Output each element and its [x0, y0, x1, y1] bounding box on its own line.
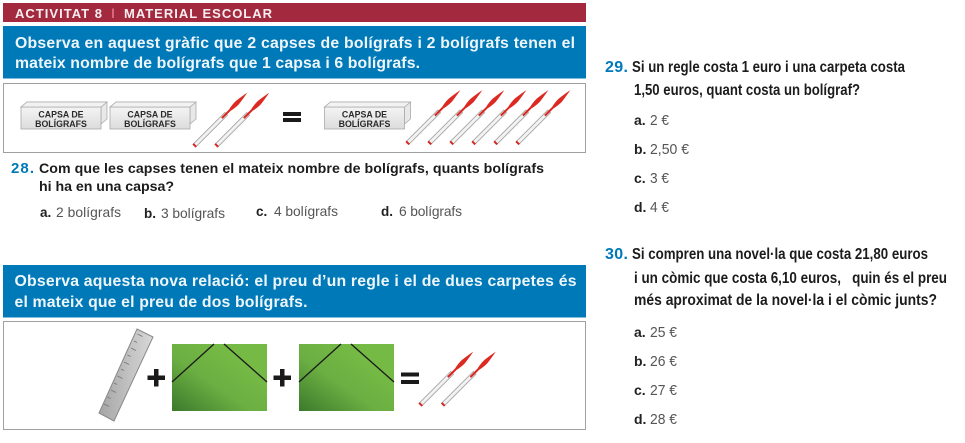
- question 28: d.: [381, 204, 393, 219]
- question 29: d.: [634, 199, 646, 215]
- panel: second blue instruction: [3, 265, 586, 318]
- question 30: c.: [634, 382, 646, 398]
- panel: second blue instruction: Observa aquesta nova relació: el preu d’un regle i el de dues carpetes és: [14, 273, 577, 290]
- question 30: 28 €: [650, 411, 678, 428]
- icon: first green folder: [172, 344, 267, 411]
- question 29: a.: [634, 112, 646, 128]
- icon: second box of pens: BOLÍGRAFS: [124, 119, 176, 129]
- icon: first box of pens: BOLÍGRAFS: [35, 119, 87, 129]
- question 28: [11, 160, 544, 221]
- question 28: 28.: [11, 160, 34, 177]
- panel: first blue instruction: Observa en aquest gràfic que 2 capses de bolígrafs i 2 bolígrafs tenen el: [15, 35, 575, 52]
- question 30: 25 €: [650, 324, 678, 341]
- panel: first blue instruction: mateix nombre de bolígrafs que 1 capsa i 6 bolígrafs.: [15, 55, 420, 72]
- header bar: activity title: ACTIVITAT 8: [15, 6, 102, 21]
- header bar: activity title: MATERIAL ESCOLAR: [124, 6, 273, 21]
- equals sign: [283, 112, 301, 122]
- icon: two pens: [418, 350, 497, 407]
- panel: first blue instruction: [3, 26, 586, 78]
- plus sign: [274, 369, 291, 386]
- icon: third box of pens: CAPSA DE: [342, 110, 387, 120]
- icon: six pens: [405, 89, 572, 145]
- icon: second box of pens: [110, 102, 196, 129]
- question 29: b.: [634, 141, 646, 157]
- icon: second green folder: [299, 344, 394, 411]
- icon: first box of pens: CAPSA DE: [38, 110, 84, 120]
- header bar: activity title: [3, 3, 586, 22]
- question 28: 6 bolígrafs: [399, 204, 462, 219]
- question 28: 3 bolígrafs: [161, 206, 225, 221]
- question 28: hi ha en una capsa?: [39, 179, 174, 195]
- question 30: 30.: [605, 246, 628, 263]
- question 28: 2 bolígrafs: [56, 205, 121, 220]
- icon: ruler: [99, 329, 153, 421]
- panel: ruler, folders and pens equation: [4, 322, 586, 430]
- panel: box and pen equation: [4, 84, 586, 152]
- question 29: 2 €: [650, 112, 670, 129]
- question 30: [605, 246, 947, 428]
- icon: first box of pens: [21, 102, 107, 129]
- question 29: Si un regle costa 1 euro i una carpeta costa: [632, 59, 905, 76]
- equals sign: [401, 372, 419, 384]
- question 28: c.: [256, 204, 267, 219]
- question 30: d.: [634, 411, 646, 427]
- question 29: c.: [634, 170, 646, 186]
- question 28: a.: [40, 205, 51, 220]
- question 28: 4 bolígrafs: [274, 204, 338, 219]
- question 28: Com que les capses tenen el mateix nombre de bolígrafs, quants bolígrafs: [39, 161, 544, 177]
- question 30: b.: [634, 353, 646, 369]
- icon: third box of pens: [324, 102, 410, 129]
- question 30: 26 €: [650, 353, 678, 370]
- question 29: 3 €: [650, 170, 670, 187]
- question 29: 4 €: [650, 199, 670, 216]
- icon: two pens: [192, 91, 271, 148]
- question 29: 1,50 euros, quant costa un bolígraf?: [634, 82, 860, 99]
- question 29: 29.: [605, 59, 628, 76]
- question 29: [605, 59, 905, 216]
- question 30: a.: [634, 324, 646, 340]
- plus sign: [148, 369, 165, 386]
- panel: second blue instruction: el mateix que el preu de dos bolígrafs.: [14, 294, 308, 311]
- icon: third box of pens: BOLÍGRAFS: [339, 119, 391, 129]
- question 29: 2,50 €: [650, 141, 690, 158]
- question 28: b.: [144, 206, 156, 221]
- icon: second box of pens: CAPSA DE: [127, 110, 173, 120]
- question 30: 27 €: [650, 382, 678, 399]
